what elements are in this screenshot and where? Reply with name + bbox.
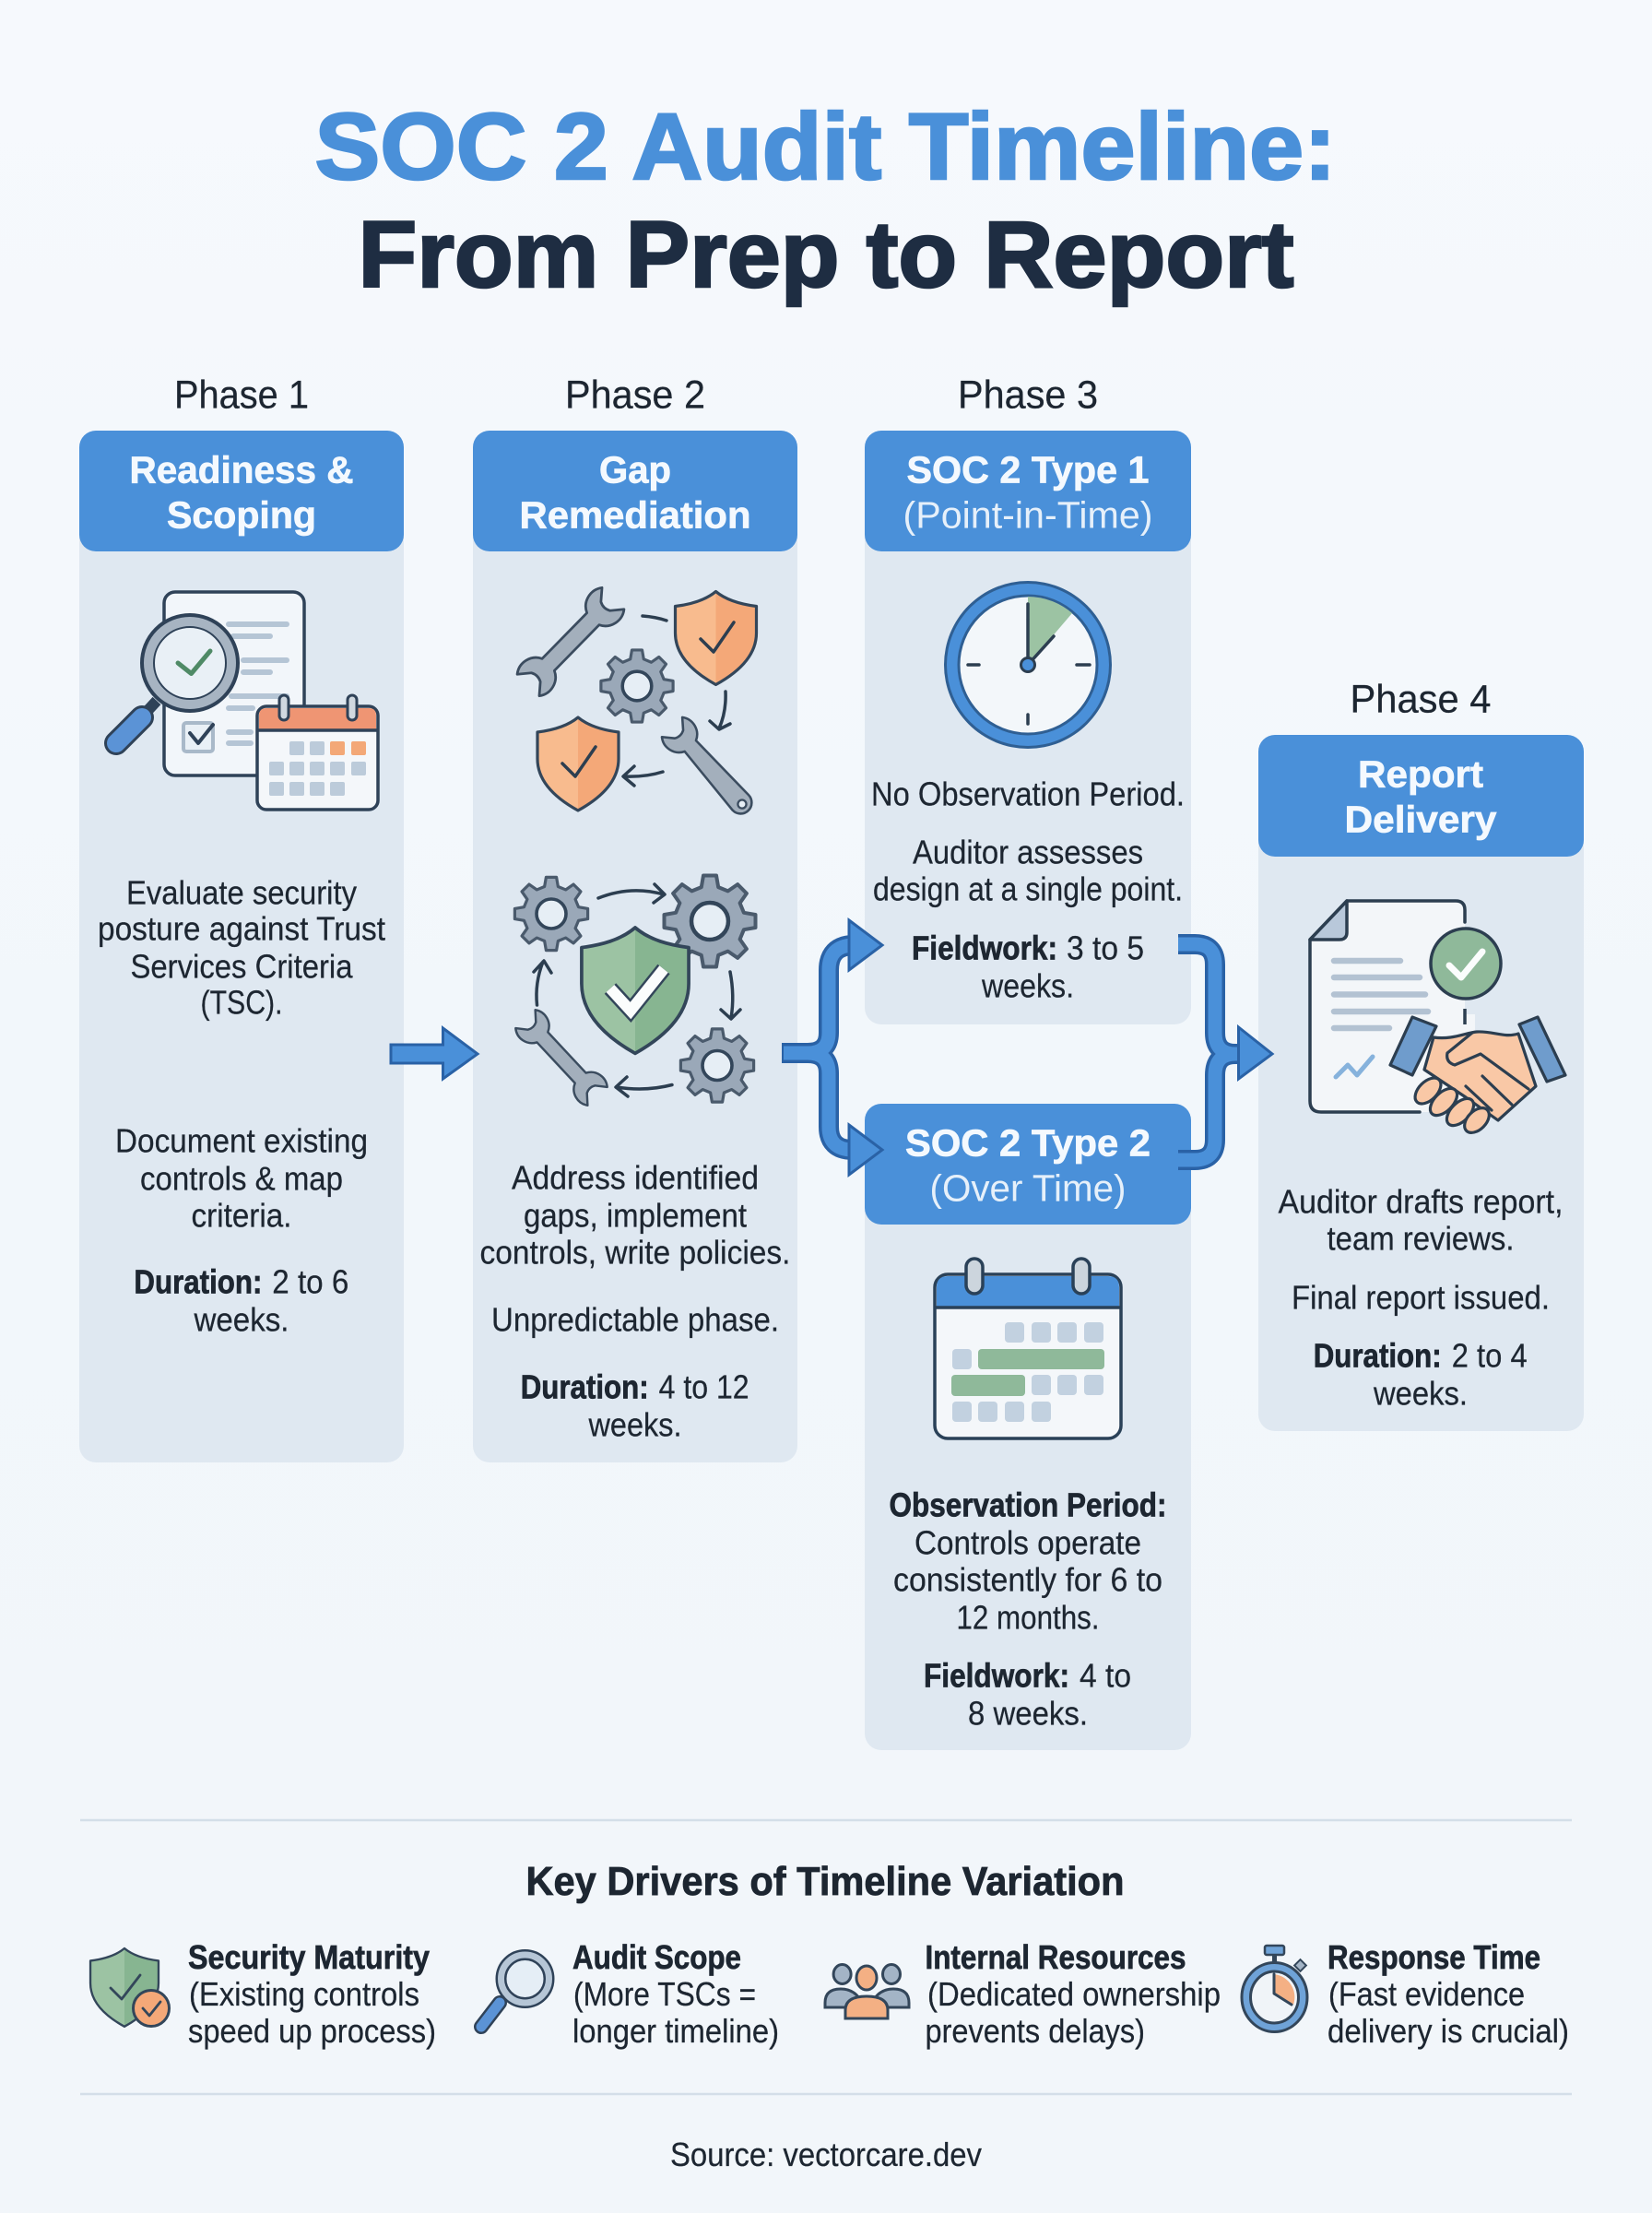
driver: internal resources: Internal Resources [926, 1938, 1186, 1976]
text: phase 4 description: Auditor drafts report, [1278, 1182, 1564, 1220]
panel: phase 4 report delivery [1258, 677, 1584, 1431]
source: Source: vectorcare.dev [670, 2136, 982, 2173]
icon: calendar with observation bars [935, 1259, 1121, 1438]
heading: key drivers: Key Drivers of Timeline Variation [525, 1859, 1125, 1904]
text: type 1 description: Auditor assesses [913, 833, 1143, 870]
driver: internal resources: prevents delays) [926, 2012, 1145, 2050]
driver: security maturity: Security Maturity [188, 1938, 430, 1976]
icon: document, magnifier and calendar [116, 592, 378, 810]
icon: clock [944, 581, 1112, 749]
panel: phase 2 gap remediation: Phase 2 [565, 373, 705, 417]
panel: phase 4 report delivery: Delivery [1344, 799, 1497, 841]
text: type 1 description: No Observation Period. [871, 775, 1185, 812]
text: phase 2 description: gaps, implement [524, 1196, 747, 1234]
text: phase 1 description: controls & map [140, 1159, 343, 1197]
text: phase 4 description: weeks. [1373, 1374, 1468, 1412]
text: type 2 description: 8 weeks. [968, 1694, 1088, 1732]
driver: response time [1242, 1938, 1569, 2050]
text: type 1 description: Fieldwork: [912, 929, 1057, 966]
icon: signed report and handshake [1310, 901, 1565, 1137]
text: phase 1 description [98, 873, 385, 1338]
panel: phase 2 gap remediation: Gap [599, 448, 671, 491]
title: SOC 2 Audit Timeline: [315, 94, 1336, 199]
driver: audit scope: longer timeline) [572, 2012, 779, 2050]
driver: internal resources [825, 1938, 1221, 2050]
icon: three people [825, 1964, 909, 2018]
text: phase 1 description: Evaluate security [126, 873, 357, 911]
text: type 2 description [889, 1485, 1167, 1732]
text: type 1 description: weeks. [981, 966, 1074, 1004]
text: phase 1 description: 2 to 6 [272, 1262, 348, 1300]
panel: phase 3 SOC 2 Type 1: Phase 3 [958, 373, 1098, 417]
text: type 2 description: Controls operate [914, 1523, 1141, 1561]
arrow: merge from type 1 and type 2 to phase 4 [1178, 944, 1272, 1160]
driver: response time: delivery is crucial) [1328, 2012, 1569, 2050]
panel: phase 3 SOC 2 Type 1: (Point-in-Time) [903, 494, 1152, 537]
text: type 2 description: 12 months. [957, 1598, 1099, 1636]
panel: phase 4 report delivery: Phase 4 [1350, 677, 1492, 721]
text: phase 1 description: Duration: [134, 1262, 262, 1300]
title: From Prep to Report [358, 202, 1294, 307]
text: phase 2 description: Unpredictable phase. [491, 1300, 779, 1338]
text: phase 1 description: (TSC). [201, 983, 282, 1021]
text: phase 1 description: weeks. [194, 1300, 289, 1338]
text: phase 1 description: Services Criteria [131, 947, 353, 985]
driver: response time: (Fast evidence [1328, 1975, 1525, 2013]
text: phase 4 description [1278, 1182, 1564, 1412]
text: phase 2 description: 4 to 12 [659, 1367, 749, 1405]
text: type 1 description [871, 775, 1185, 1004]
panel: phase 1 readiness and scoping: Readiness & [129, 448, 354, 491]
text: type 1 description: 3 to 5 [1067, 929, 1144, 966]
icon: magnifier [481, 1955, 549, 2027]
text: phase 4 description: team reviews. [1328, 1219, 1514, 1257]
driver: security maturity [90, 1938, 436, 2050]
driver: audit scope: Audit Scope [572, 1938, 741, 1976]
arrow: phase 1 to phase 2 [391, 1028, 478, 1079]
icon: gears cycle around green shield [513, 876, 756, 1107]
text: phase 4 description: Duration: [1314, 1336, 1442, 1374]
driver: security maturity: (Existing controls [189, 1975, 419, 2013]
panel: phase 3 SOC 2 Type 2: (Over Time) [929, 1167, 1127, 1210]
driver: security maturity: speed up process) [188, 2012, 436, 2050]
text: phase 1 description: criteria. [192, 1196, 291, 1234]
title [315, 94, 1336, 307]
text: type 2 description: 4 to [1080, 1656, 1131, 1694]
text: phase 2 description: Duration: [521, 1367, 649, 1405]
driver: audit scope: (More TSCs = [573, 1975, 756, 2013]
panel: phase 2 gap remediation [473, 373, 797, 1462]
driver: internal resources: (Dedicated ownership [927, 1975, 1221, 2013]
icon: wrenches, gear and orange shields [514, 585, 763, 821]
text: phase 2 description: Address identified [512, 1158, 759, 1196]
text: phase 1 description: Document existing [115, 1121, 368, 1159]
panel: phase 2 gap remediation: Remediation [520, 494, 750, 537]
panel: phase 1 readiness and scoping [79, 373, 404, 1462]
text: type 2 description: consistently for 6 to [893, 1560, 1162, 1598]
text: phase 2 description [479, 1158, 791, 1443]
panel: phase 1 readiness and scoping: Phase 1 [174, 373, 309, 417]
driver: audit scope [481, 1938, 779, 2050]
driver: response time: Response Time [1328, 1938, 1540, 1976]
panel: phase 4 report delivery: Report [1358, 752, 1483, 795]
icon: stopwatch [1242, 1946, 1307, 2032]
icon: shield with check badge [90, 1948, 170, 2027]
text: phase 2 description: controls, write policies. [479, 1233, 791, 1271]
text: phase 1 description: posture against Trust [98, 909, 385, 947]
text: type 2 description: Observation Period: [889, 1485, 1167, 1523]
panel: phase 1 readiness and scoping: Scoping [167, 494, 316, 537]
arrow: branch from phase 2 to type 1 and type 2 [782, 920, 882, 1175]
text: type 2 description: Fieldwork: [924, 1656, 1069, 1694]
panel: phase 3 SOC 2 Type 2: SOC 2 Type 2 [905, 1121, 1150, 1164]
panel: phase 3 SOC 2 Type 1 [865, 373, 1191, 1024]
text: phase 4 description: 2 to 4 [1452, 1336, 1528, 1374]
text: phase 4 description: Final report issued. [1292, 1278, 1550, 1316]
text: phase 2 description: weeks. [588, 1405, 682, 1443]
panel: phase 3 SOC 2 Type 1: SOC 2 Type 1 [907, 448, 1149, 491]
panel: phase 3 SOC 2 Type 2 [865, 1104, 1191, 1750]
text: type 1 description: design at a single point. [873, 870, 1183, 907]
